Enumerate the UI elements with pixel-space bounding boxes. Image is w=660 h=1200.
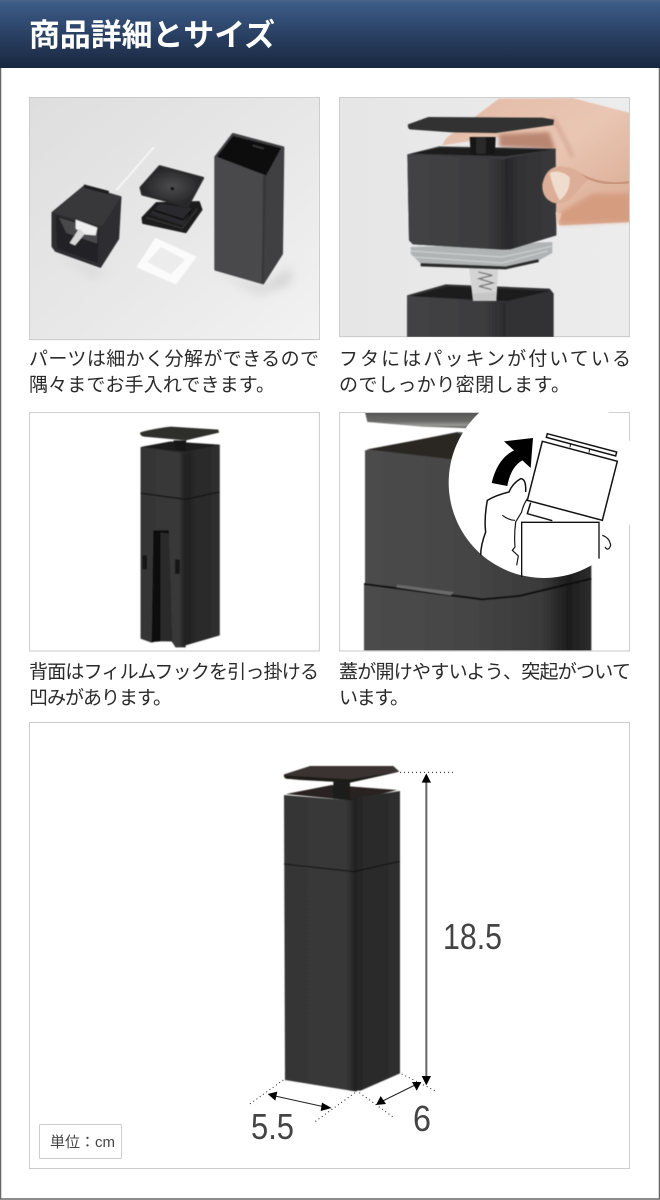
arrow: lift direction (492, 438, 533, 486)
caption: parts: 隅々までお手入れできます。 (29, 374, 275, 396)
tall body (216, 134, 283, 283)
lower body (364, 578, 591, 652)
caption: lid tab: います。 (339, 688, 409, 709)
tower (140, 427, 220, 647)
arrow: height (422, 773, 431, 1085)
caption: back recess: 凹みがあります。 (29, 687, 172, 709)
hand (442, 98, 630, 225)
header band (0, 0, 660, 68)
inset circle (448, 412, 630, 578)
caption: lid tab: 蓋が開けやすいよう、突起がついて (339, 661, 631, 683)
panel: dimensions (30, 722, 630, 1168)
caption: lid gasket: フタにはパッキンが付いている (339, 348, 631, 370)
arrow: depth (376, 1082, 421, 1105)
pump head: open cube (52, 184, 121, 267)
caption: parts: パーツは細かく分解ができるので (29, 348, 319, 370)
caption: parts (29, 348, 319, 396)
dotted guides (248, 772, 453, 1122)
caption: back recess (29, 661, 319, 709)
panel: back of the product with film hook recess (29, 412, 319, 651)
spring tube (469, 268, 498, 301)
product body (284, 766, 400, 1092)
panel: hand holding lid with gasket (339, 97, 630, 337)
lower body (407, 284, 554, 337)
upper body (365, 432, 591, 600)
depth value: 6 (413, 1098, 431, 1139)
arrow: width (268, 1092, 332, 1111)
illustration: opening the lid (481, 434, 617, 577)
shadows (88, 269, 293, 295)
caption: lid gasket: のでしっかり密閉します。 (339, 374, 570, 396)
lid edge (365, 412, 482, 429)
tab (396, 585, 454, 595)
caption: lid gasket (339, 348, 631, 396)
cap and nozzle parts (141, 166, 203, 232)
height value: 18.5 (443, 916, 502, 957)
thumb (542, 166, 587, 225)
straw (116, 147, 154, 190)
title: 商品詳細とサイズ (29, 18, 275, 53)
upper body with stem (407, 137, 556, 250)
product with dimensions (248, 766, 453, 1122)
white gasket (137, 239, 196, 284)
lid plate (408, 117, 554, 133)
gasket (411, 242, 552, 269)
caption: back recess: 背面はフィルムフックを引っ掛ける (29, 661, 319, 683)
panel: lid tab close-up with inset illustration (339, 412, 630, 652)
unit label (40, 1124, 122, 1158)
width value: 5.5 (251, 1106, 294, 1147)
panel: disassembled parts photo (29, 97, 320, 340)
unit label: 単位：cm (50, 1134, 115, 1151)
caption: lid tab (339, 661, 631, 709)
